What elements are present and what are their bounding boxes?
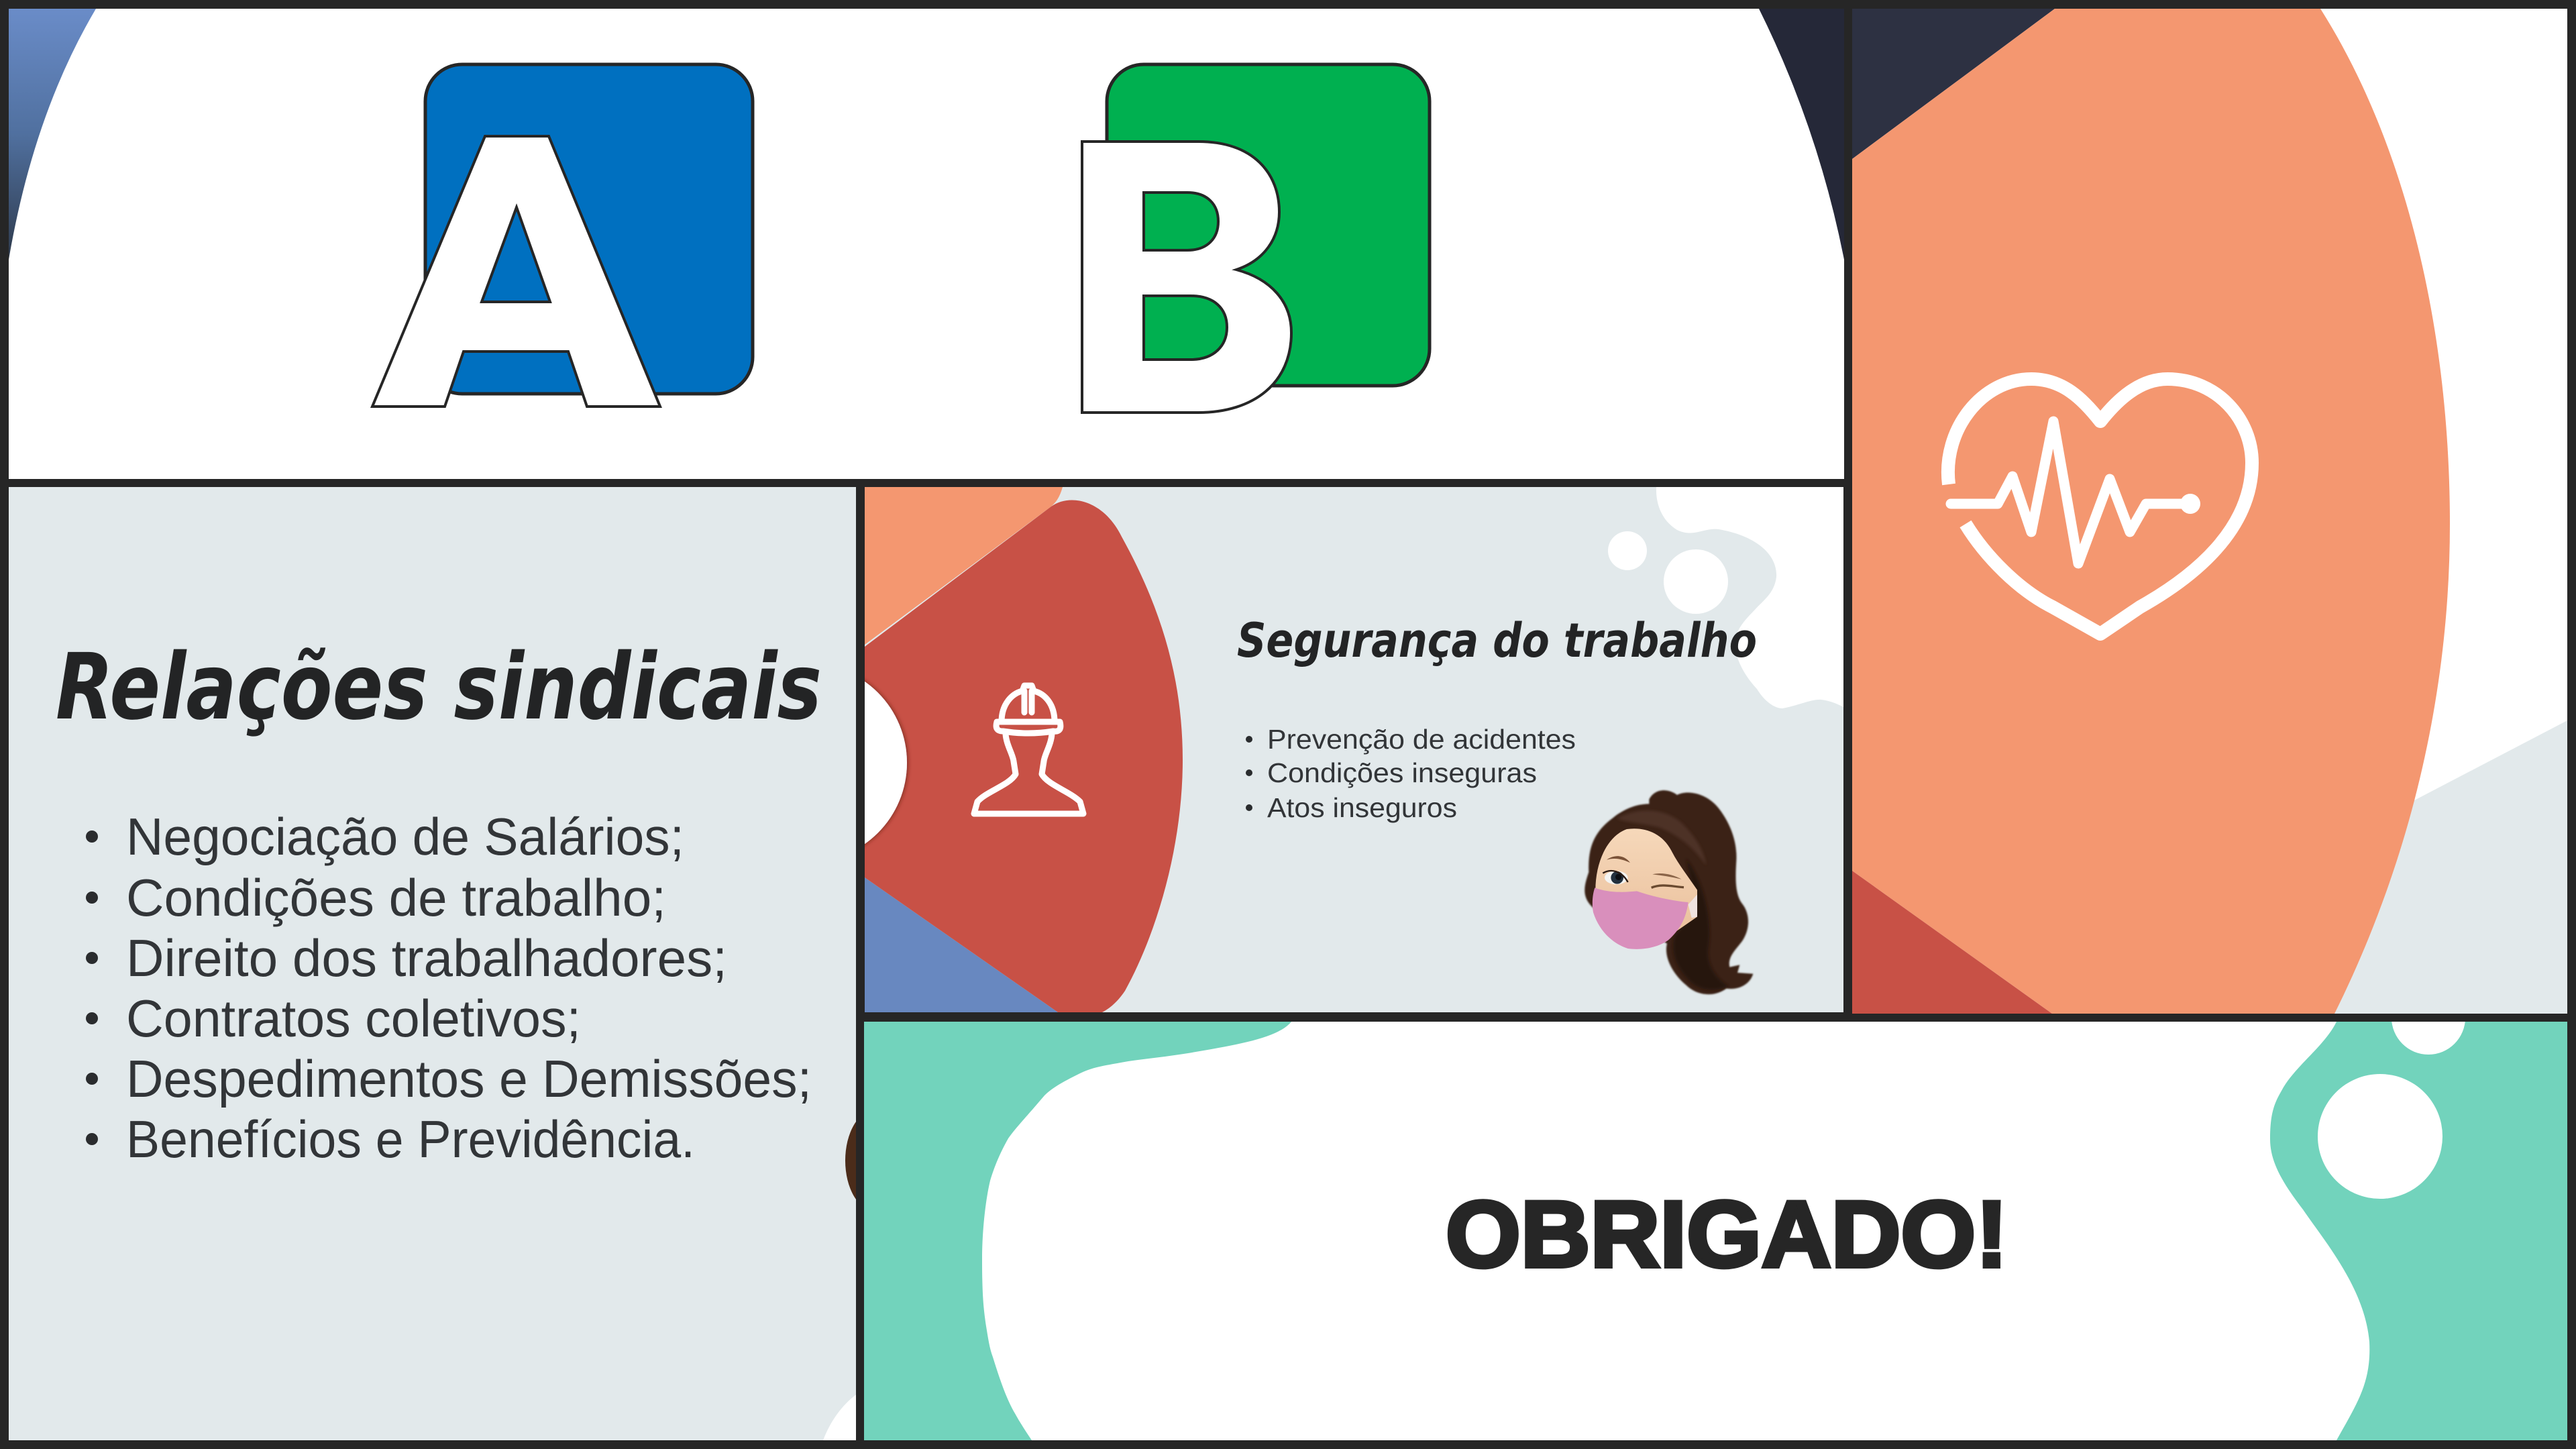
list: safety topics [1246, 724, 1576, 823]
shape: peach corner [865, 487, 1063, 645]
list: safety topics: Atos inseguros [1267, 792, 1457, 823]
panel: Segurança do trabalho [865, 487, 1843, 1012]
heading: Obrigado: OBRIGADO! [1446, 1181, 2008, 1287]
list: safety topics: Condições inseguras [1267, 757, 1537, 788]
shape: navy triangle [1852, 9, 2055, 159]
corner: blue wedge [9, 9, 96, 260]
decorative circles [1608, 531, 1728, 614]
list: union topics: Negociação de Salários; [126, 807, 684, 866]
icon: avatar with pink mask [1585, 790, 1753, 994]
shape: grey corner [2281, 720, 2567, 1014]
decorative circles [2318, 981, 2465, 1199]
corner: white blob [823, 1395, 856, 1440]
corner: navy wedge [1759, 9, 1844, 260]
icon: heart with pulse line [1948, 379, 2252, 634]
logo: letter B on green square [1082, 64, 1430, 413]
panel: heart health [1852, 9, 2567, 1014]
list: union topics: Despedimentos e Demissões; [126, 1049, 812, 1108]
list: union topics [86, 807, 812, 1169]
blob: white top right [1656, 487, 1843, 708]
blob: white centre [982, 1022, 2369, 1440]
icon: worker with helmet [974, 686, 1083, 814]
panel: Relações sindicais [9, 487, 856, 1440]
list: union topics: Condições de trabalho; [126, 868, 666, 927]
shape: red triangle [1852, 871, 2052, 1014]
panel: Obrigado [864, 1022, 2567, 1440]
shape: red fan [865, 500, 1183, 1012]
list: union topics: Direito dos trabalhadores; [126, 928, 727, 987]
shape: blue corner [865, 877, 1058, 1012]
logo: letter A on blue square [372, 64, 753, 407]
list: union topics: Benefícios e Previdência. [126, 1110, 695, 1169]
sliver: avatar hair edge [845, 1110, 904, 1211]
list: union topics: Contratos coletivos; [126, 989, 581, 1048]
list: safety topics: Prevenção de acidentes [1267, 724, 1576, 755]
heading: Segurança do trabalho: Segurança do trabalho [1237, 613, 1757, 668]
panel: A and B logos [9, 9, 1844, 479]
shape: white circle [708, 663, 907, 862]
shape: peach circle [1852, 9, 2450, 1014]
